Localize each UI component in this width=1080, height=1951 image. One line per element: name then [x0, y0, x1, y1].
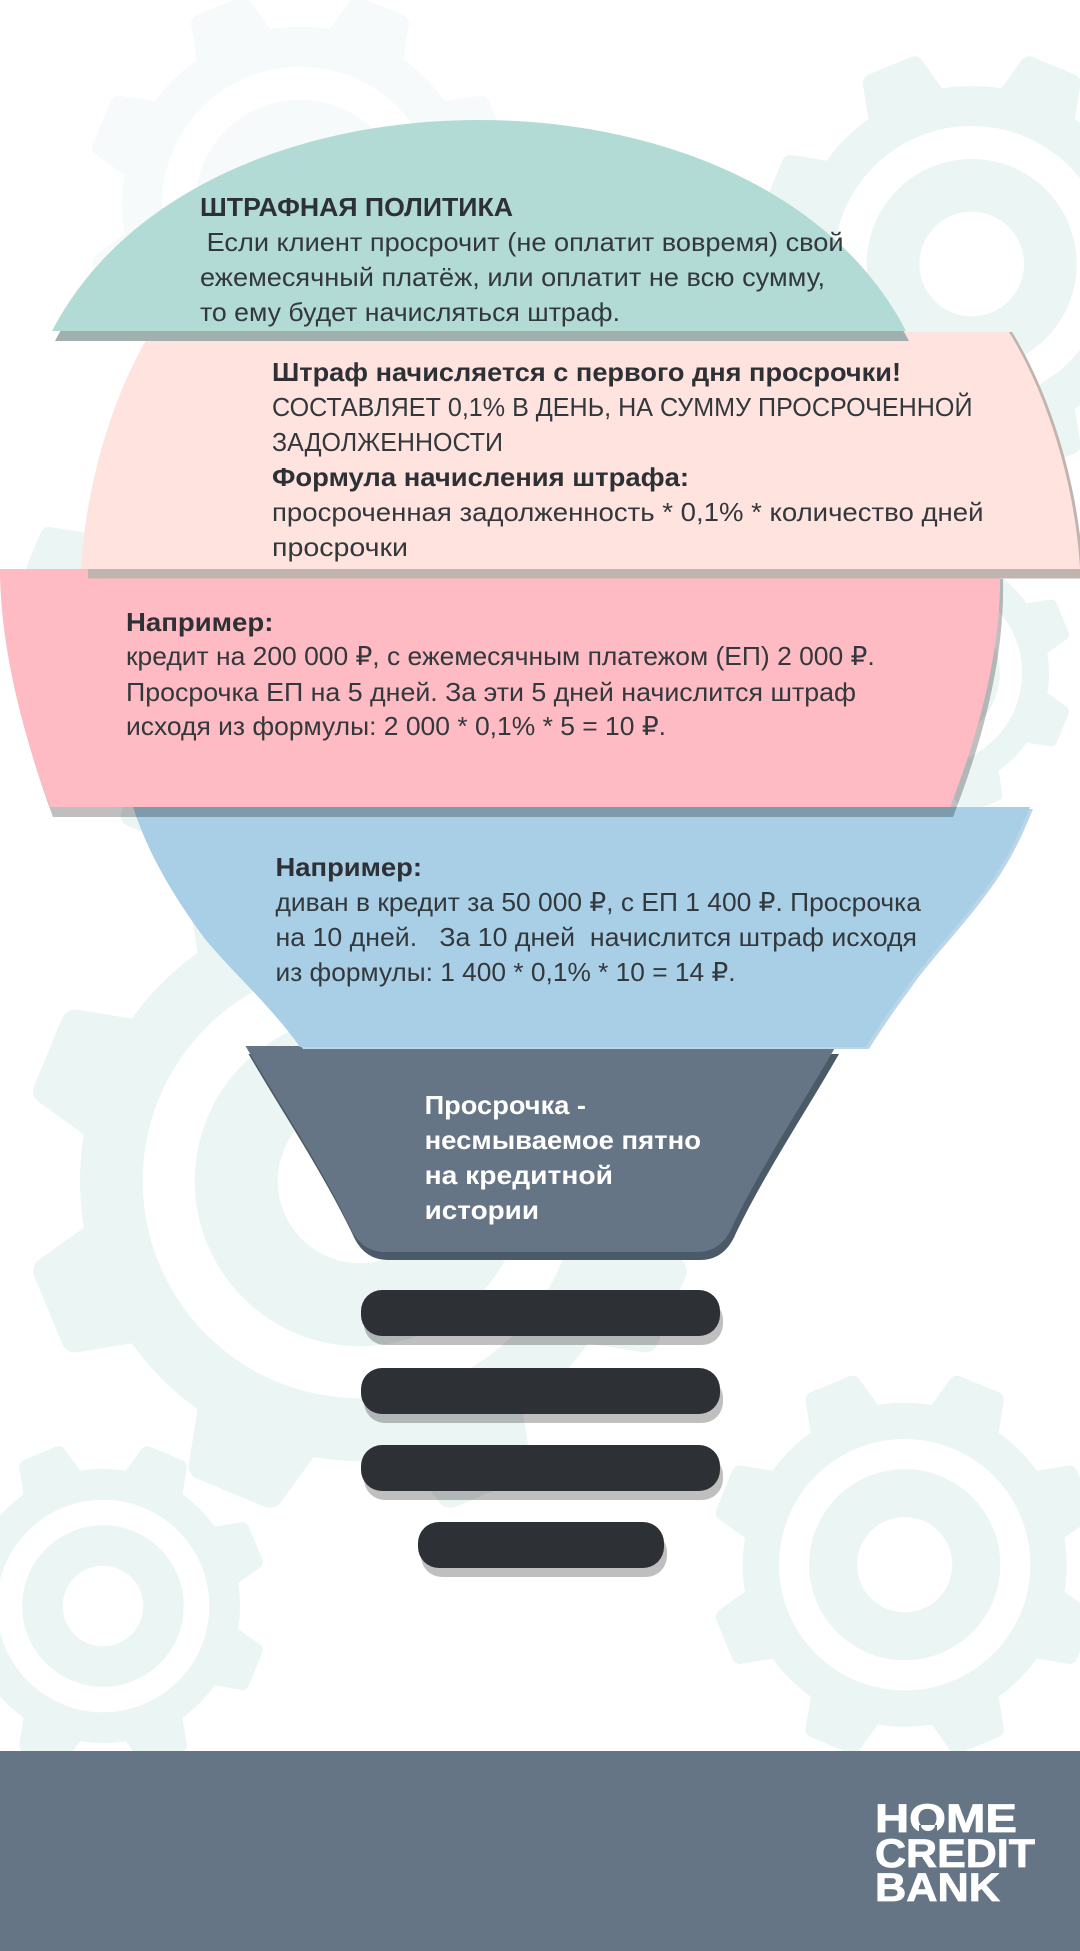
panel: peach formula: [81, 332, 1080, 578]
panel: pink example loan: [0, 569, 1003, 817]
panel: bulb base slate: [246, 1046, 839, 1260]
text: formula: ЗАДОЛЖЕННОСТИ: [272, 427, 503, 457]
bar 1: [361, 1290, 723, 1345]
text: penalty policy intro: Если клиент просрочит (не оплатит вовремя) свой: [207, 227, 844, 257]
text: sofa example: [276, 852, 922, 987]
text: loan example: Например:: [126, 607, 273, 637]
background gear: top left: [97, 2, 503, 408]
text: loan example: [126, 607, 875, 741]
text: formula: Формула начисления штрафа:: [272, 462, 689, 492]
text: stain on credit history: [425, 1090, 701, 1225]
text: stain on credit history: несмываемое пятно: [425, 1125, 701, 1155]
text: formula: просроченная задолженность * 0,1% * количество дней: [272, 497, 984, 527]
text: loan example: Просрочка ЕП на 5 дней. За эти 5 дней начислится штраф: [126, 677, 856, 707]
text: formula: СОСТАВЛЯЕТ 0,1% В ДЕНЬ, НА СУММУ ПРОСРОЧЕННОЙ: [272, 392, 972, 422]
logo: Home Credit Bank: BANK: [875, 1866, 1000, 1910]
text: penalty policy intro: то ему будет начисляться штраф.: [200, 297, 620, 327]
text: loan example: исходя из формулы: 2 000 * 0,1% * 5 = 10 ₽.: [126, 711, 666, 741]
text: stain on credit history: Просрочка -: [425, 1090, 586, 1120]
background gear: large centre: [41, 862, 679, 1500]
footer band: [0, 1751, 1080, 1951]
panel: teal dome heading: [52, 120, 909, 341]
logo: Home Credit Bank: CREDIT: [875, 1832, 1035, 1876]
bar 4: [418, 1522, 667, 1577]
text: sofa example: диван в кредит за 50 000 ₽, с ЕП 1 400 ₽. Просрочка: [276, 887, 922, 917]
text: penalty policy intro: ежемесячный платёж, или оплатит не всю сумму,: [200, 262, 825, 292]
background gear: middle left: [27, 433, 433, 839]
text: sofa example: Например:: [276, 852, 422, 882]
text: stain on credit history: истории: [425, 1195, 539, 1225]
panel: blue example sofa: [133, 807, 1033, 1049]
text: formula: Штраф начисляется с первого дня просрочки!: [272, 357, 901, 387]
background gear: top right: [769, 61, 1080, 467]
background gear: bottom right: [720, 1380, 1080, 1749]
bulb screw bars: [361, 1290, 723, 1577]
text: sofa example: из формулы: 1 400 * 0,1% * 10 = 14 ₽.: [276, 957, 736, 987]
text: stain on credit history: на кредитной: [425, 1160, 613, 1190]
text: formula: просрочки: [272, 532, 408, 562]
bar 3: [361, 1445, 723, 1500]
logo: Home Credit Bank: [875, 1797, 1035, 1910]
text: penalty policy intro: [200, 227, 844, 327]
title: ШТРАФНАЯ ПОЛИТИКА: [200, 192, 513, 222]
bar 2: [361, 1368, 723, 1423]
text: loan example: кредит на 200 000 ₽, с ежемесячным платежом (ЕП) 2 000 ₽.: [126, 641, 875, 671]
background gear: bottom left: [0, 1450, 259, 1762]
background gear: middle right: [792, 536, 1066, 810]
text: formula: [272, 357, 984, 562]
text: sofa example: на 10 дней. За 10 дней начислится штраф исходя: [276, 922, 917, 952]
logo: Home Credit Bank: HOME: [875, 1797, 1017, 1841]
